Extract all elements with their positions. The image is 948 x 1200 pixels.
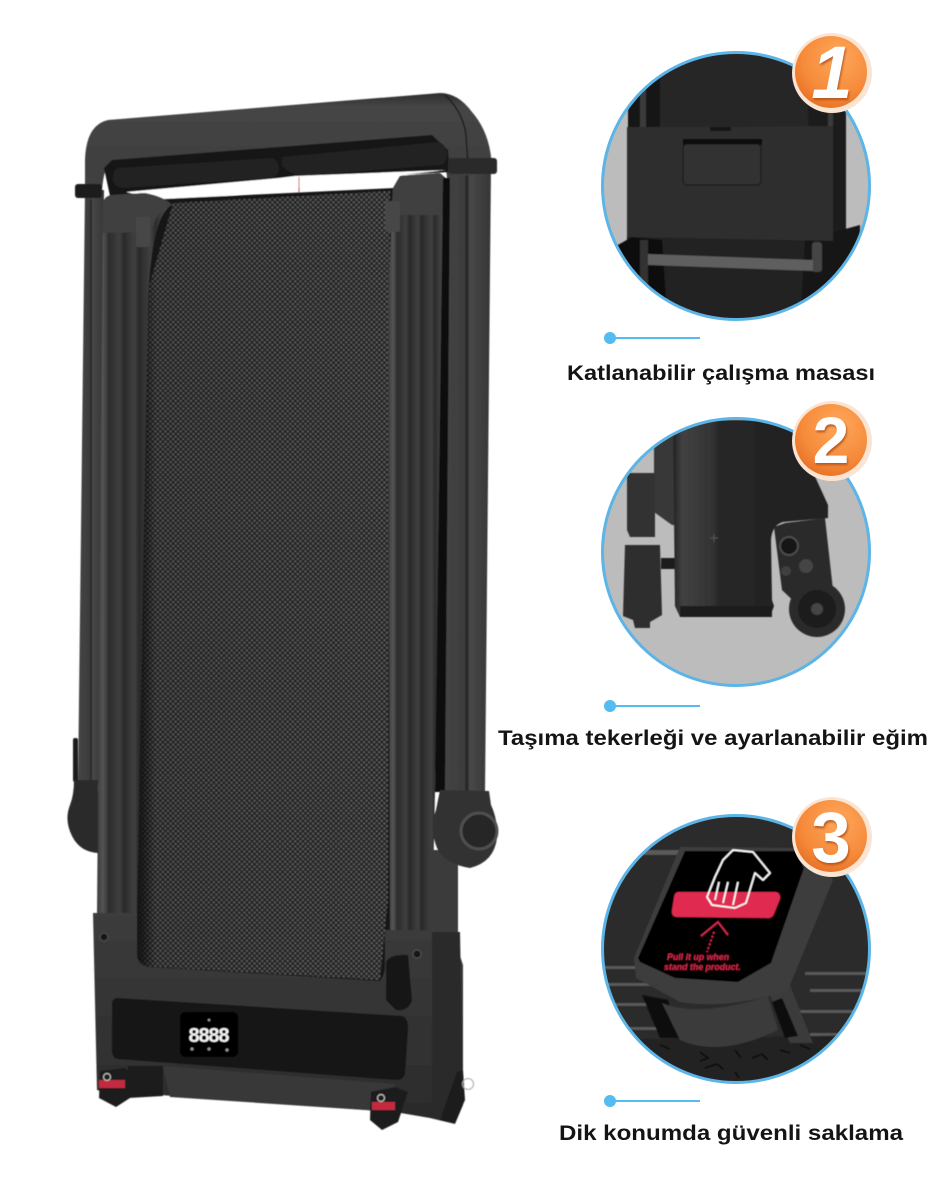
right rail gap	[435, 178, 450, 792]
red wire	[298, 177, 300, 197]
badge 3: 3	[811, 799, 851, 878]
lock left	[99, 1068, 134, 1107]
console panel	[112, 998, 408, 1080]
warning text: Pull it up when	[667, 952, 729, 962]
bolt right	[413, 950, 421, 958]
display buttons	[190, 1019, 228, 1052]
desk pad right	[282, 142, 447, 176]
main body	[673, 420, 828, 617]
background stripes	[600, 850, 875, 1036]
wheel	[789, 581, 845, 637]
right side rail	[388, 173, 448, 932]
rail clip left	[136, 217, 150, 247]
left outer post	[78, 190, 104, 785]
panel 1: foldable desk	[600, 50, 870, 330]
cross mark	[710, 534, 718, 542]
right hinge strip	[430, 850, 458, 935]
circle background	[602, 815, 870, 1083]
lower left block	[623, 545, 662, 628]
belt edge shade	[138, 191, 390, 980]
circle photo	[623, 420, 845, 637]
rear ring	[462, 1078, 474, 1090]
red dotted arrow stem	[707, 932, 714, 952]
right hinge knob	[461, 813, 497, 849]
badge 2: 2	[813, 403, 849, 477]
label 1: Katlanabilir çalışma masası	[567, 362, 875, 385]
left hinge	[67, 780, 98, 853]
red arrow head	[701, 922, 728, 936]
lower base dark foot	[128, 1066, 163, 1098]
white gap under desk	[126, 170, 446, 203]
desk handle	[683, 144, 761, 185]
circle background	[602, 418, 870, 686]
handlebar side seam	[445, 95, 468, 165]
wheel bracket	[774, 518, 834, 599]
desk box	[627, 126, 833, 241]
display digits: 8888	[188, 1025, 230, 1047]
label 2: Taşıma tekerleği ve ayarlanabilir eğim	[498, 727, 928, 750]
left side rail	[97, 193, 172, 916]
left hinge clip	[73, 738, 78, 782]
circle border	[602, 418, 870, 686]
belt underlay	[132, 188, 394, 985]
lower base plate	[163, 1066, 395, 1112]
warning text: stand the product.	[664, 962, 741, 972]
badge 2	[792, 401, 872, 481]
hand icon	[707, 850, 770, 908]
desk pad left	[113, 158, 279, 188]
latch bracket right	[770, 985, 813, 1043]
circle border	[602, 816, 870, 1082]
crossbar	[648, 254, 813, 271]
panel 2: transport wheels	[602, 418, 870, 686]
panel 3: upright storage	[600, 815, 875, 1090]
base right side shade	[432, 932, 463, 1112]
bolt left	[100, 933, 108, 941]
base housing	[93, 913, 463, 1124]
connector 3	[604, 1095, 700, 1107]
handlebar inner shadow	[104, 135, 450, 196]
label 3: Dik konumda güvenli saklama	[559, 1122, 903, 1145]
latch opening left	[642, 995, 680, 1038]
lock face	[638, 851, 804, 982]
left rail cap	[102, 193, 172, 233]
treadmill product illustration	[67, 93, 497, 1130]
connector 1	[604, 332, 700, 344]
circle border	[602, 52, 870, 320]
lock housing	[634, 847, 833, 1004]
badge 1: 1	[811, 31, 853, 114]
handlebar frame	[85, 93, 492, 205]
hinge bolt left	[75, 184, 102, 198]
right outer post	[443, 165, 491, 792]
fold knob	[386, 955, 412, 1010]
floor tread marks	[660, 1045, 810, 1078]
latch roller	[662, 996, 778, 1047]
hinge bolt right	[448, 158, 497, 174]
lock right	[370, 1087, 408, 1130]
rail clip right	[385, 201, 400, 232]
badge 1	[792, 31, 872, 114]
right rail cap	[391, 173, 447, 215]
circle photo	[618, 54, 861, 318]
right hinge	[433, 790, 497, 868]
badge 3	[792, 797, 872, 878]
connector 2	[604, 700, 700, 712]
circle background	[602, 52, 870, 320]
floor mat	[640, 1036, 835, 1081]
upper left block	[627, 473, 655, 537]
desk handle recess	[683, 139, 762, 145]
circle photo	[600, 847, 875, 1090]
rear wheel bracket	[440, 1070, 465, 1123]
console display	[180, 1012, 238, 1057]
treadmill belt	[138, 191, 390, 980]
lower dark frame	[626, 236, 806, 318]
red pull bar	[672, 892, 780, 918]
